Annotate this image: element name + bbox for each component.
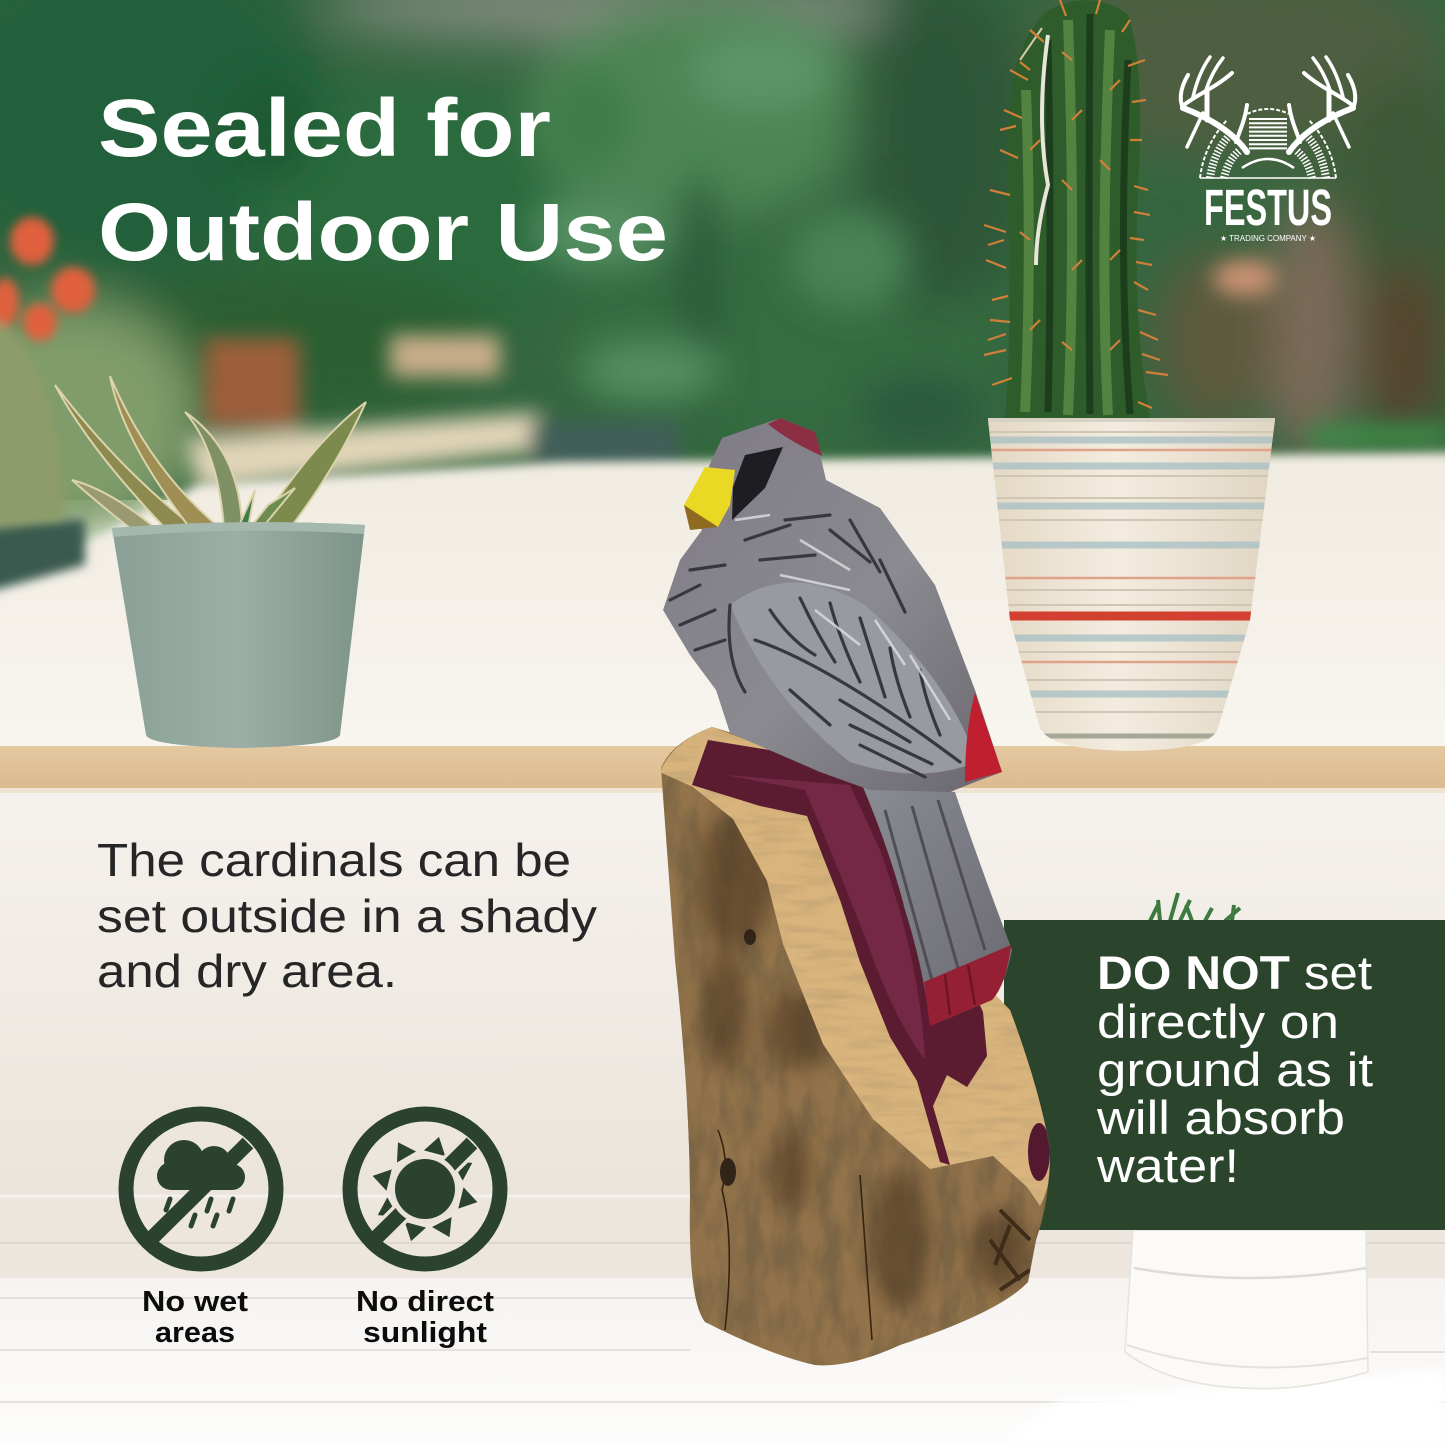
dark green callout panel xyxy=(1004,920,1445,1230)
icon label: no direct sunlight xyxy=(356,1286,494,1349)
title xyxy=(98,83,668,278)
carved cardinal bird xyxy=(663,418,1012,1026)
icon label: no direct sunlight: No direct xyxy=(356,1286,494,1318)
crest xyxy=(768,418,822,456)
knots xyxy=(1028,1123,1050,1181)
icon: no direct sunlight xyxy=(350,1114,500,1264)
red heartwood xyxy=(692,740,987,1165)
callout text: DO NOT xyxy=(1097,946,1290,999)
small plant behind dark panel xyxy=(1150,893,1240,921)
background: pale terrace floor xyxy=(0,452,1445,770)
wing xyxy=(730,582,977,774)
callout text: water! xyxy=(1096,1139,1239,1192)
title: Sealed for xyxy=(98,83,551,174)
cactus xyxy=(984,0,1168,418)
body text: set outside in a shady xyxy=(97,890,597,942)
red wing tip xyxy=(965,693,1002,782)
logo: tree-ring emblem xyxy=(1200,109,1336,178)
flowering plant far left xyxy=(0,217,95,530)
icon: no wet areas xyxy=(126,1114,276,1264)
aloe plant in sage pot xyxy=(55,376,366,748)
feather grooves xyxy=(670,515,960,777)
callout text: set xyxy=(1304,946,1372,999)
body xyxy=(663,418,1002,792)
background: blurred garden photo xyxy=(0,0,1445,540)
ledge wall and tan cap xyxy=(0,746,1445,1208)
icon label: no wet areas: No wet xyxy=(142,1286,248,1318)
icon label: no wet areas xyxy=(142,1286,248,1349)
callout text: will absorb xyxy=(1096,1091,1345,1144)
logo: wordmark: FESTUS xyxy=(1204,179,1332,236)
carved wooden stump xyxy=(660,727,1052,1365)
body text: The cardinals can be xyxy=(97,834,571,886)
logo: antlers xyxy=(1181,57,1355,178)
white bucket planter xyxy=(1125,1230,1368,1389)
striped ceramic pot xyxy=(985,420,1280,751)
callout text: ground as it xyxy=(1097,1043,1373,1096)
callout text: directly on xyxy=(1097,995,1339,1048)
title: Outdoor Use xyxy=(98,187,668,278)
logo: tagline: ★ TRADING COMPANY ★ xyxy=(1220,234,1316,243)
white plank table xyxy=(0,1195,1445,1445)
icon label: no direct sunlight: sunlight xyxy=(363,1317,487,1349)
pale cut wood face xyxy=(660,727,1052,1206)
logo: Festus Trading Company xyxy=(1181,57,1355,243)
eye mask xyxy=(732,447,783,520)
callout text xyxy=(1096,946,1373,1192)
body text xyxy=(97,834,597,997)
body text: and dry area. xyxy=(97,945,397,997)
yellow beak xyxy=(684,467,735,527)
icon label: no wet areas: areas xyxy=(155,1317,235,1349)
tail xyxy=(860,780,1012,1026)
